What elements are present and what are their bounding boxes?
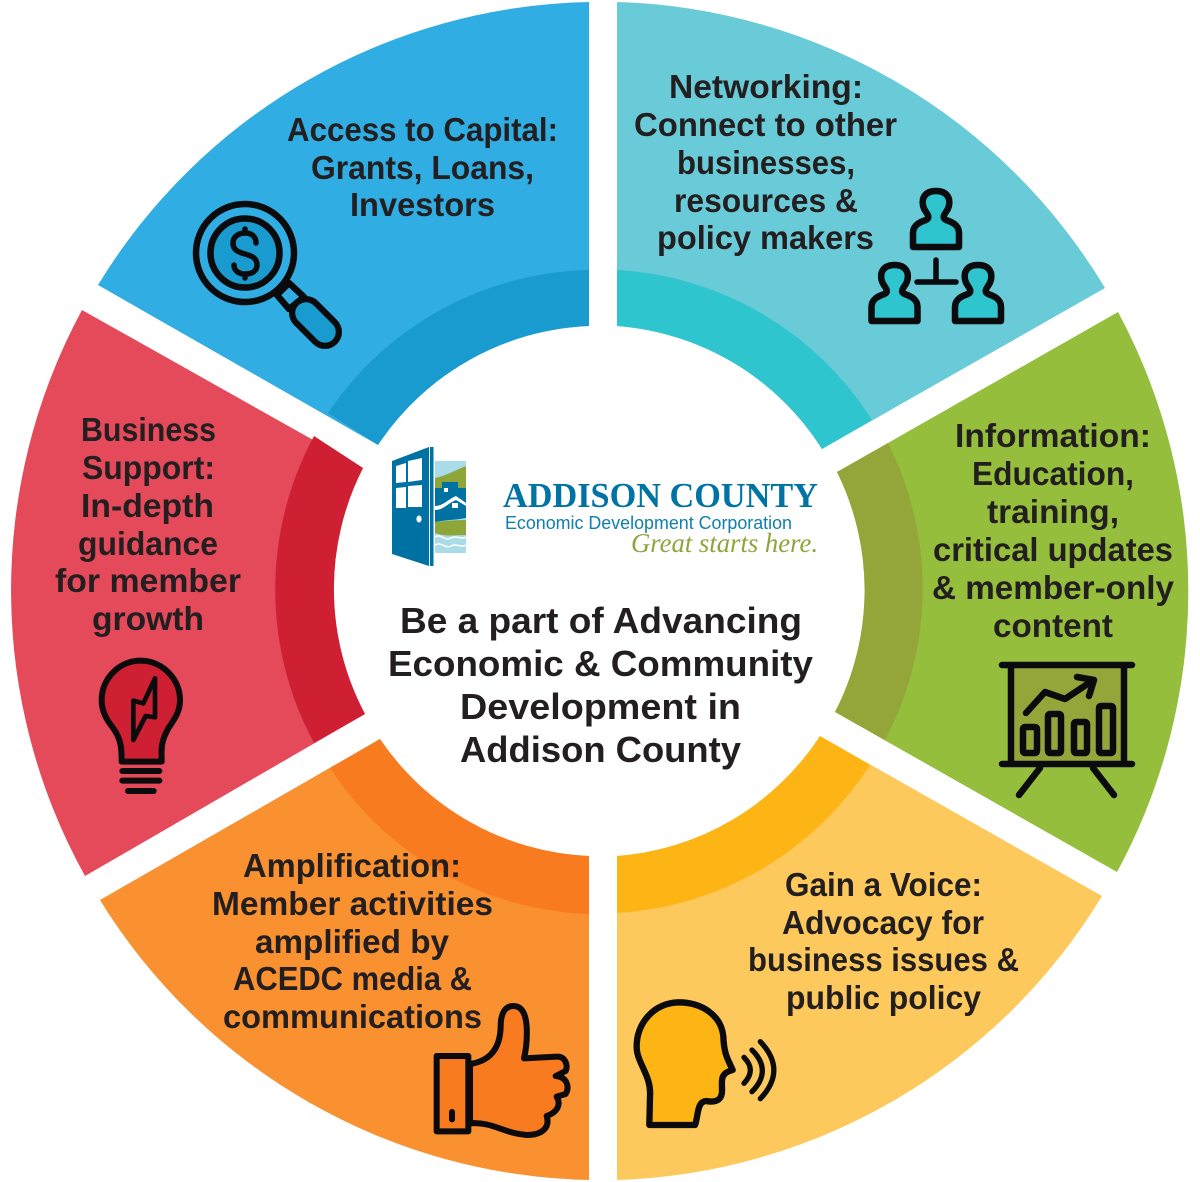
center heading: Development in [460,686,741,727]
text: amplification: Member activities [212,885,493,922]
text: networking: businesses, [677,144,855,181]
text: amplification: communications [223,998,482,1035]
text: gain a voice: public policy [786,979,982,1016]
center heading [388,600,813,770]
icon: connected people [872,191,1001,321]
text: information: critical updates [933,531,1173,568]
panel: amplification [100,739,589,1180]
logo wordmark: ADDISON COUNTY [503,476,818,515]
logo subtitle: Economic Development Corporation [505,513,792,533]
center heading: Economic & Community [388,643,813,684]
text: business support: In-depth [81,487,214,524]
text: business support [55,411,241,637]
text: access to capital: Grants, Loans, [311,149,534,186]
center heading: Addison County [460,729,741,770]
text: access to capital: Access to Capital: [287,111,558,148]
text: amplification: amplified by [255,923,450,960]
icon: magnifying glass with dollar [196,204,325,332]
text: business support: growth [92,600,204,637]
icon: light bulb [102,661,180,791]
text: networking [634,68,897,256]
panel: business support [11,310,365,876]
center: logo [392,447,818,566]
logo tagline: Great starts here. [631,528,818,558]
text: business support: Business [81,411,216,448]
text: networking: resources & [674,182,858,219]
panel: information [835,312,1188,872]
text: information: & member-only [932,569,1175,606]
text: amplification: Amplification: [243,847,461,884]
text: access to capital: Investors [350,186,495,223]
text: gain a voice: Gain a Voice: [785,866,982,903]
icon: open door logo [392,447,466,566]
text: information: content [993,607,1113,644]
text: business support: Support: [82,449,215,486]
text: gain a voice [748,866,1019,1016]
text: information: Information: [955,417,1151,454]
panel: access to capital [98,2,589,445]
text: business support: guidance [78,525,218,562]
text: networking: Connect to other [634,106,897,143]
text: access to capital [287,111,558,223]
text: amplification: ACEDC media & [233,960,472,997]
text: networking: policy makers [657,219,874,256]
text: networking: Networking: [669,68,863,105]
text: gain a voice: business issues & [748,941,1019,978]
panel: networking [617,2,1105,449]
icon: presentation board with chart [1002,665,1132,795]
text: information: Education, [972,455,1134,492]
icon: thumbs up [437,1006,568,1135]
panel: gain a voice [617,736,1102,1180]
text: information: training, [987,493,1119,530]
center heading: Be a part of Advancing [400,600,802,641]
icon: speaking head [637,1002,774,1125]
text: gain a voice: Advocacy for [782,904,984,941]
text: information [932,417,1175,644]
text: amplification [212,847,493,1035]
text: business support: for member [55,562,241,599]
